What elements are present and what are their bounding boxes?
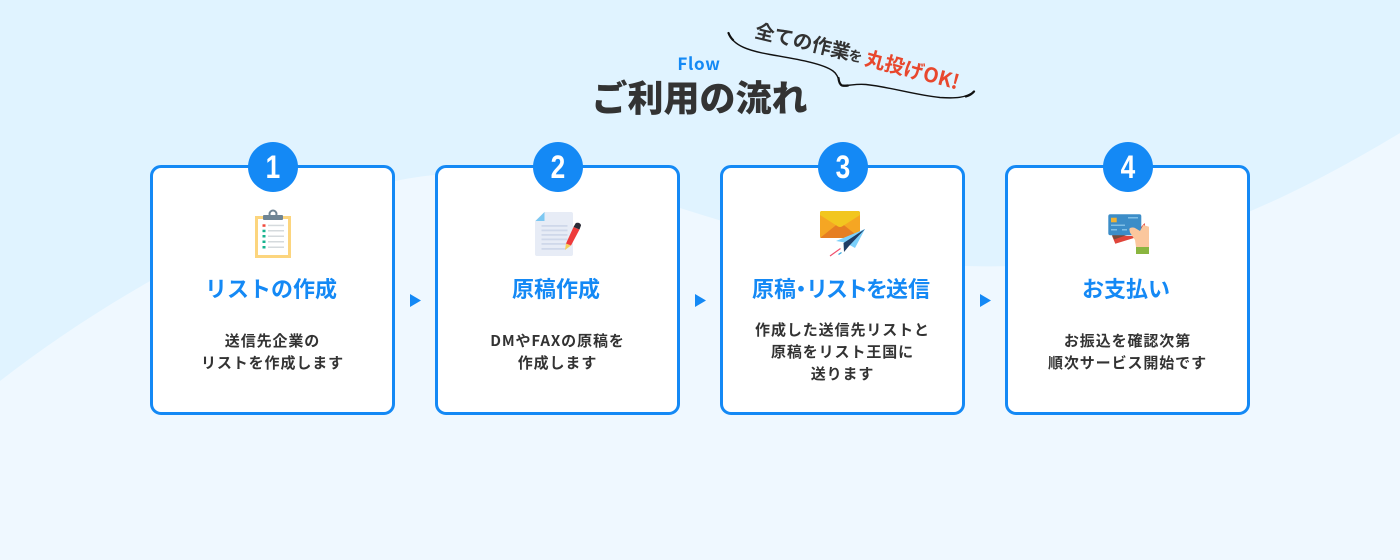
icon: clipboard: [255, 210, 291, 258]
heading: 原稿作成: [512, 272, 600, 304]
step card 2: [435, 165, 680, 415]
number badge 3: [818, 142, 868, 192]
arrow 1: [410, 294, 421, 307]
description: 順次サービス開始です: [1048, 352, 1207, 373]
section label: Flow: Flow: [677, 50, 721, 75]
description: [755, 319, 930, 384]
description: 作成します: [518, 352, 597, 373]
heading: お支払い: [1082, 272, 1170, 304]
callout: 全ての作業を丸投げOK! with swoosh: 丸投げOK!: [862, 42, 963, 95]
step card 4: [1005, 165, 1250, 415]
description: DMやFAXの原稿を: [490, 330, 625, 351]
icon: document and pencil: [535, 212, 581, 256]
step card 1: [150, 165, 395, 415]
description: リストを作成します: [201, 352, 344, 373]
description: 送信先企業の: [225, 330, 320, 351]
heading: リストの作成: [205, 272, 337, 304]
number badge 2: 2: [551, 149, 565, 185]
number badge 2: [533, 142, 583, 192]
number badge 4: 4: [1121, 149, 1135, 185]
step card 3: [720, 165, 965, 415]
callout: 全ての作業を丸投げOK! with swoosh: 全ての作業を: [752, 15, 867, 69]
icon: envelope and paper plane: [820, 211, 865, 256]
description: [1048, 330, 1207, 373]
description: 送ります: [811, 363, 874, 384]
number badge 3: 3: [836, 149, 850, 185]
description: [490, 330, 625, 373]
description: 作成した送信先リストと: [755, 319, 930, 340]
number badge 1: 1: [266, 149, 280, 185]
description: お振込を確認次第: [1064, 330, 1191, 351]
callout: 全ての作業を丸投げOK! with swoosh: [727, 15, 976, 99]
title: ご利用の流れ: [591, 70, 808, 122]
description: 原稿をリスト王国に: [771, 341, 914, 362]
number badge 1: [248, 142, 298, 192]
heading: 原稿・リストを送信: [752, 272, 930, 304]
arrow 3: [980, 294, 991, 307]
arrow 2: [695, 294, 706, 307]
number badge 4: [1103, 142, 1153, 192]
description: [201, 330, 344, 373]
icon: credit card and hand: [1108, 214, 1149, 254]
